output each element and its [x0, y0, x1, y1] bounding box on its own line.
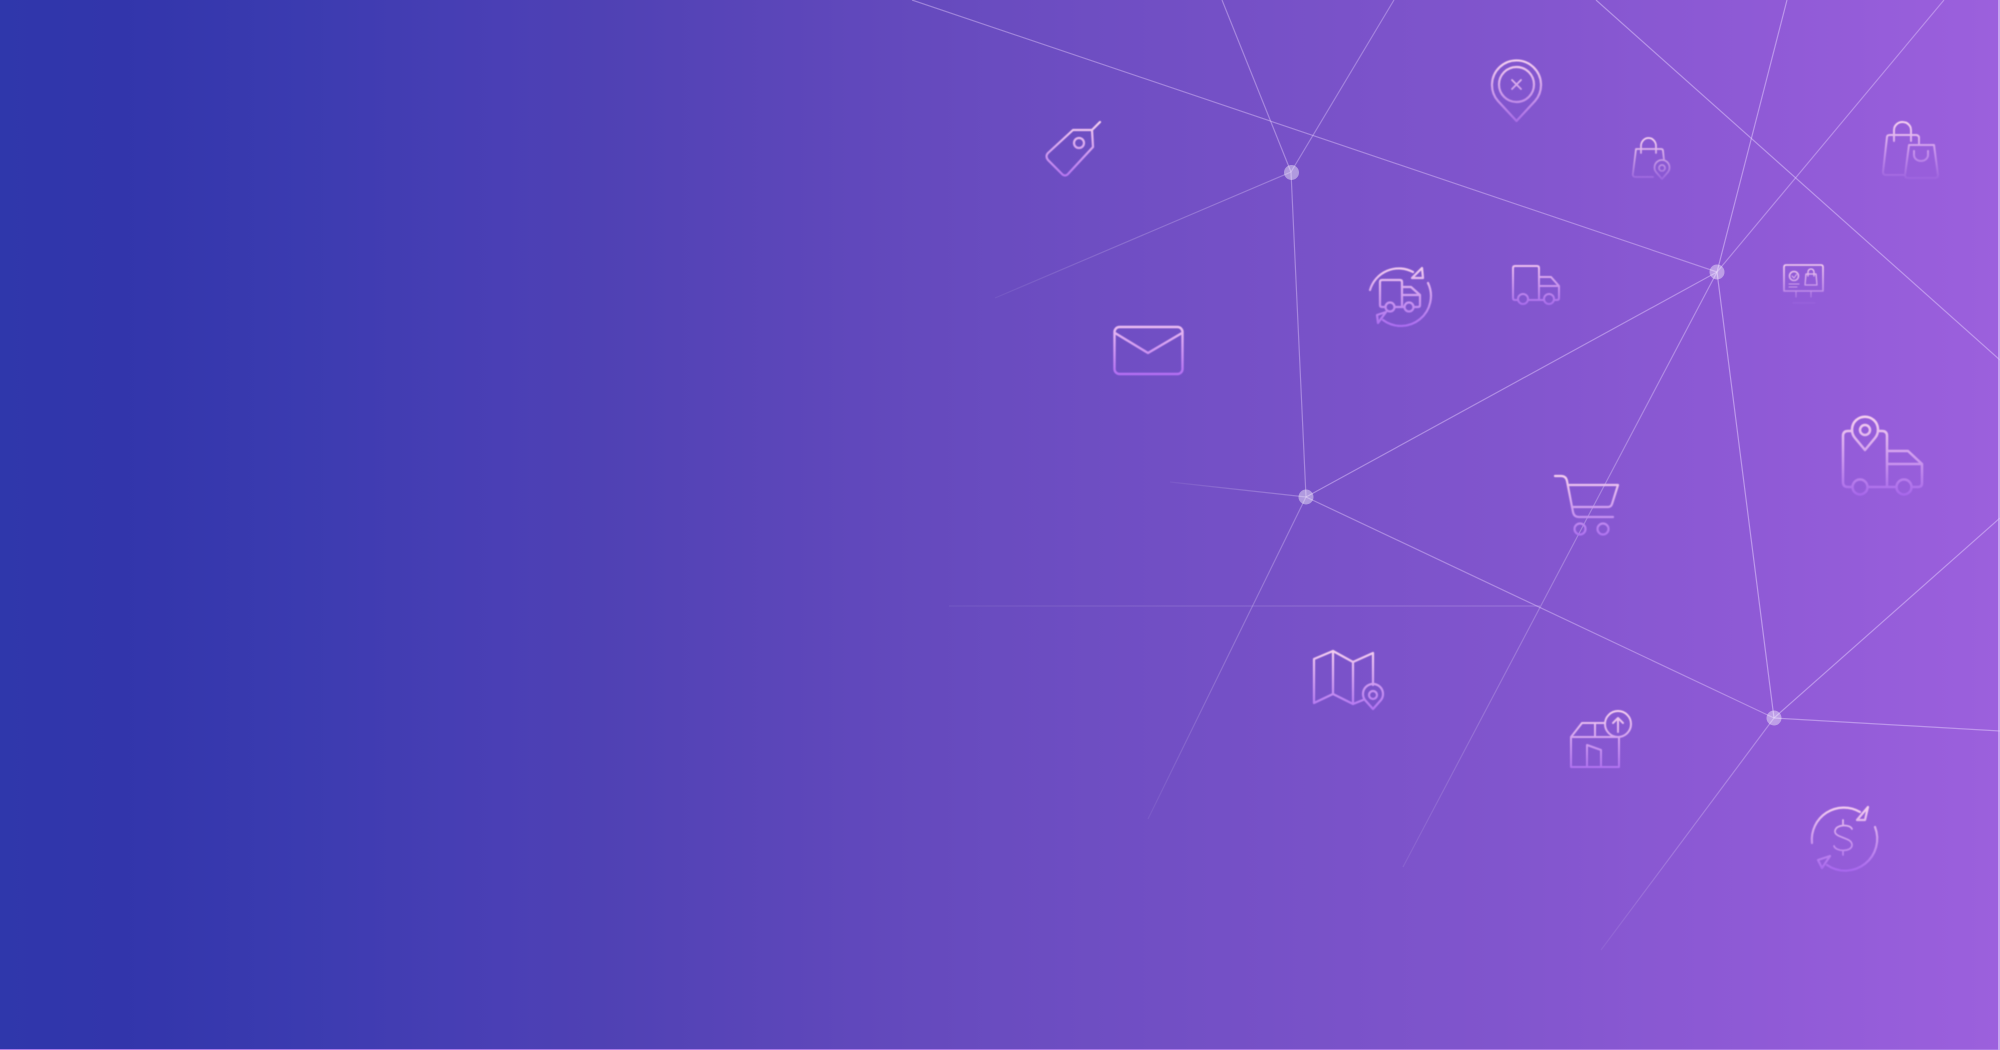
icon: two shopping bags — [1883, 122, 1938, 178]
icon: dollar in refund loop — [1812, 807, 1877, 871]
icon: store with upload arrow — [1571, 711, 1631, 767]
icon: shopping cart — [1555, 476, 1618, 534]
icon: price tag — [1046, 122, 1100, 176]
icon: envelope — [1114, 327, 1182, 374]
icon: delivery truck — [1513, 266, 1559, 304]
icon: map with pin — [1314, 651, 1383, 709]
network lines — [912, 0, 2000, 950]
icon: truck with location pin — [1843, 417, 1922, 494]
network nodes — [1284, 165, 1782, 726]
icon: online store monitor — [1784, 265, 1823, 303]
icon: location pin with cross — [1492, 60, 1541, 121]
icon: shopping bag with pin — [1633, 138, 1669, 179]
icon: delivery truck in return loop — [1370, 268, 1431, 326]
